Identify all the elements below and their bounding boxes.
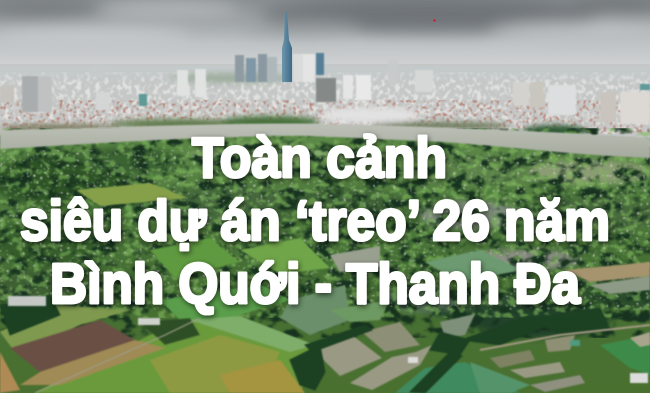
tree lines (0, 295, 610, 393)
vegetation patches (0, 143, 650, 338)
city skyline (0, 53, 650, 147)
fish ponds (308, 314, 650, 392)
title line 1: Toàn cảnh (192, 126, 447, 190)
icon: Landmark tower (282, 12, 292, 82)
title line 3: Bình Quới - Thanh Đa (50, 252, 581, 316)
title (20, 126, 610, 316)
red dot (433, 19, 436, 22)
fields and ponds (0, 183, 650, 393)
land base (0, 130, 650, 395)
river (0, 124, 650, 158)
tree and house texture (0, 128, 650, 338)
roads and houses (8, 296, 650, 393)
sky with clouds (0, 0, 650, 64)
